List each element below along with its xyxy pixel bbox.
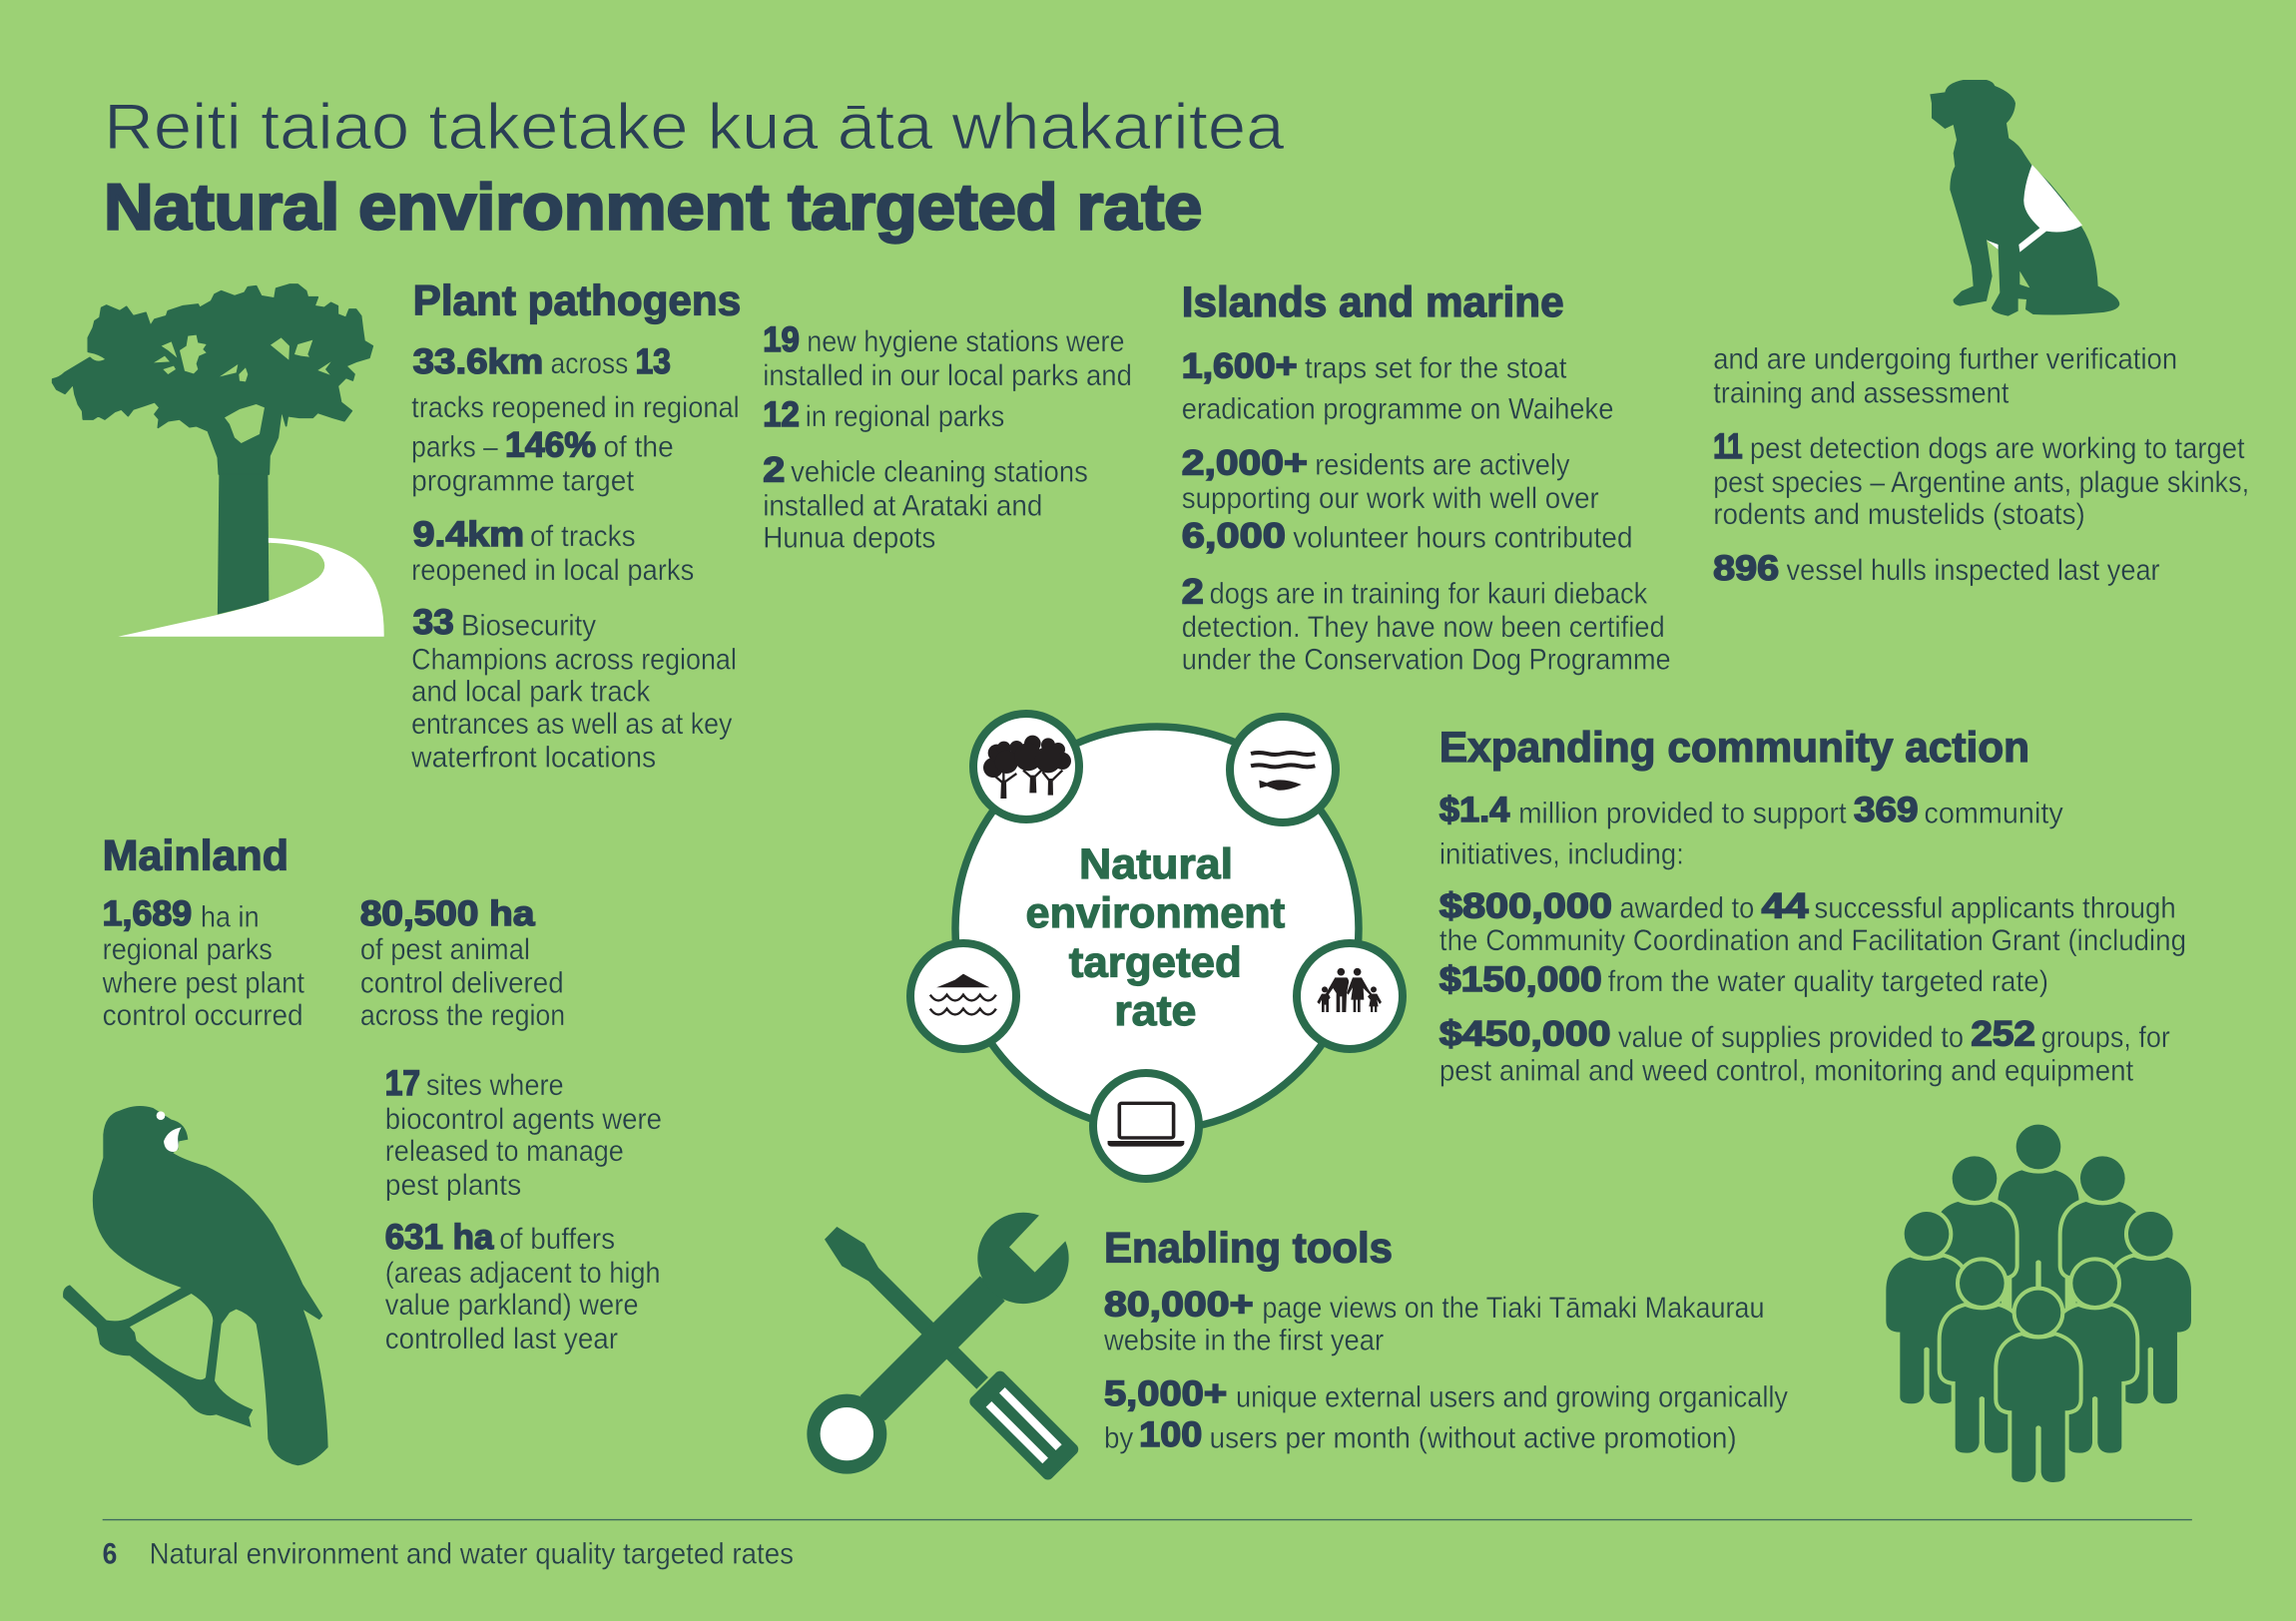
text: dogs and vessel hulls: and are undergoing further verification — [1713, 343, 2177, 376]
heading: mainland: Mainland — [103, 831, 288, 879]
icon badge: family — [1297, 943, 1403, 1049]
text: islands and marine stats: 6,000 — [1182, 517, 1286, 556]
text: plant pathogens stats, first column: 33.6km — [413, 342, 543, 381]
text: pest plant control — [102, 894, 304, 1032]
text: hygiene and cleaning stations: Hunua depots — [763, 522, 935, 555]
text: pest plant control: control occurred — [103, 999, 303, 1032]
icon badge: laptop — [1093, 1073, 1199, 1179]
text: enabling tools stats: by — [1104, 1422, 1134, 1455]
text: community funding stats: from the water quality targeted rate) — [1608, 965, 2048, 998]
text: community funding stats: $150,000 — [1439, 960, 1602, 999]
text: plant pathogens stats, first column: of tracks — [530, 520, 636, 553]
text: plant pathogens stats, first column: Champions across regional — [411, 643, 737, 676]
icon: group of people — [1886, 1125, 2191, 1482]
text: enabling tools stats: unique external users and growing organically — [1236, 1381, 1788, 1414]
text: plant pathogens stats, first column: and local park track — [411, 676, 651, 709]
text: community funding stats: $450,000 — [1439, 1014, 1611, 1053]
text: community funding stats — [1439, 791, 2186, 1088]
title: Natural environment targeted rate — [104, 172, 1202, 244]
text: islands and marine stats: volunteer hours contributed — [1293, 522, 1633, 555]
text: enabling tools stats: website in the first year — [1103, 1324, 1384, 1356]
label: natural environment targeted rate: targeted — [1069, 938, 1242, 986]
text: hygiene and cleaning stations: vehicle cleaning stations — [791, 456, 1088, 489]
text: plant pathogens stats, first column: Biosecurity — [461, 610, 596, 643]
text: islands and marine stats: residents are actively — [1315, 448, 1570, 481]
text: community funding stats: 252 — [1971, 1014, 2035, 1053]
heading: islands and marine: Islands and marine — [1182, 278, 1564, 326]
text: community funding stats: pest animal and weed control, monitoring and equipment — [1439, 1055, 2133, 1088]
text: hygiene and cleaning stations: 19 — [763, 320, 800, 359]
text: biocontrol and buffers: 631 ha — [385, 1218, 494, 1257]
heading: expanding community action: Expanding community action — [1439, 724, 2029, 772]
text: enabling tools stats: 5,000+ — [1104, 1374, 1227, 1413]
icon badge: island and waves — [910, 943, 1016, 1049]
text: community funding stats: $1.4 — [1439, 791, 1510, 829]
panel: mainland — [102, 831, 662, 1355]
text: biocontrol and buffers: of buffers — [499, 1223, 615, 1256]
text: dogs and vessel hulls — [1713, 343, 2249, 588]
icon badge: trees — [973, 714, 1079, 819]
icon: crossed wrench and screwdriver — [807, 1213, 1081, 1482]
text: pest animal control — [360, 894, 565, 1032]
text: hygiene and cleaning stations: in regional parks — [806, 400, 1004, 433]
text: plant pathogens stats, first column: 33 — [413, 603, 454, 642]
text: hygiene and cleaning stations: installed at Arataki and — [763, 489, 1042, 522]
panel: islands and marine — [1182, 278, 2249, 676]
text: dogs and vessel hulls: pest detection dogs are working to target — [1750, 432, 2245, 465]
text: islands and marine stats: detection. They have now been certified — [1182, 611, 1665, 644]
text: community funding stats: groups, for — [2041, 1021, 2170, 1054]
text: pest animal control: across the region — [360, 999, 565, 1032]
footer: Natural environment and water quality targeted rates — [150, 1538, 794, 1571]
text: community funding stats: $800,000 — [1439, 887, 1612, 926]
text: islands and marine stats: 2,000+ — [1182, 443, 1308, 482]
title: Reiti taiao taketake kua āta whakaritea — [104, 91, 1285, 163]
text: biocontrol and buffers: controlled last year — [385, 1323, 618, 1355]
text: enabling tools stats: 100 — [1139, 1415, 1202, 1454]
text: islands and marine stats: dogs are in training for kauri dieback — [1210, 577, 1647, 610]
text: plant pathogens stats, first column: of the — [603, 431, 674, 464]
text: pest plant control: where pest plant — [102, 967, 304, 1000]
text: plant pathogens stats, first column: programme target — [411, 464, 634, 497]
text: dogs and vessel hulls: rodents and mustelids (stoats) — [1713, 498, 2085, 531]
text: enabling tools stats: 80,000+ — [1104, 1286, 1254, 1325]
text: hygiene and cleaning stations: 12 — [763, 395, 800, 434]
text: pest plant control: ha in — [201, 901, 260, 934]
label: natural environment targeted rate: rate — [1114, 987, 1196, 1035]
text: community funding stats: 369 — [1854, 791, 1919, 829]
text: pest plant control: regional parks — [103, 933, 273, 966]
text: biocontrol and buffers: released to manage — [385, 1135, 624, 1168]
text: biocontrol and buffers: sites where — [426, 1069, 564, 1102]
title — [104, 91, 1285, 244]
text: hygiene and cleaning stations — [763, 320, 1132, 555]
label: natural environment targeted rate: environment — [1026, 889, 1285, 937]
text: plant pathogens stats, first column: waterfront locations — [410, 742, 656, 775]
text: community funding stats: awarded to — [1619, 892, 1754, 925]
text: enabling tools stats — [1103, 1286, 1788, 1455]
text: community funding stats: million provided to support — [1518, 797, 1847, 829]
text: islands and marine stats: under the Conservation Dog Programme — [1182, 643, 1671, 676]
text: islands and marine stats: supporting our work with well over — [1182, 482, 1599, 515]
text: hygiene and cleaning stations: 2 — [763, 451, 785, 490]
heading: enabling tools: Enabling tools — [1104, 1224, 1393, 1272]
text: plant pathogens stats, first column: parks – — [411, 431, 498, 464]
footer: 6 — [103, 1538, 117, 1571]
text: hygiene and cleaning stations: new hygiene stations were — [807, 325, 1125, 358]
text: islands and marine stats: 1,600+ — [1182, 346, 1298, 385]
text: pest animal control: of pest animal — [360, 933, 530, 966]
icon: kaka bird on branch — [63, 1106, 328, 1465]
text: islands and marine stats: 2 — [1182, 572, 1204, 611]
text: pest plant control: 1,689 — [103, 894, 192, 933]
icon badge: water and fish — [1230, 717, 1336, 822]
diagram: central circle with five icons — [910, 714, 1403, 1179]
text: community funding stats: the Community Coordination and Facilitation Grant (including — [1439, 924, 2186, 957]
text: plant pathogens stats, first column: across — [551, 347, 628, 380]
text: plant pathogens stats, first column: reopened in local parks — [411, 554, 694, 587]
text: plant pathogens stats, first column: 13 — [636, 342, 671, 381]
text: dogs and vessel hulls: training and assessment — [1713, 376, 2009, 409]
text: islands and marine stats: eradication programme on Waiheke — [1182, 393, 1613, 426]
text: dogs and vessel hulls: 11 — [1713, 427, 1743, 466]
text: community funding stats: community — [1924, 797, 2063, 829]
text: biocontrol and buffers: (areas adjacent to high — [385, 1257, 661, 1290]
text: biocontrol and buffers: pest plants — [385, 1169, 521, 1202]
text: pest animal control: control delivered — [360, 967, 564, 1000]
text: enabling tools stats: users per month (without active promotion) — [1210, 1422, 1737, 1455]
main white circle — [955, 727, 1359, 1130]
label: natural environment targeted rate — [1026, 840, 1285, 1035]
text: islands and marine stats: traps set for the stoat — [1305, 351, 1567, 384]
text: plant pathogens stats, first column: entrances as well as at key — [411, 708, 733, 741]
text: community funding stats: successful applicants through — [1814, 892, 2176, 925]
text: community funding stats: value of supplies provided to — [1618, 1021, 1964, 1054]
panel: plant pathogens — [410, 276, 1132, 775]
text: biocontrol and buffers: biocontrol agents were — [385, 1103, 662, 1136]
text: plant pathogens stats, first column — [410, 342, 740, 775]
text: plant pathogens stats, first column: tracks reopened in regional — [411, 391, 740, 424]
text: plant pathogens stats, first column: 146% — [505, 426, 596, 465]
text: dogs and vessel hulls: pest species – Argentine ants, plague skinks, — [1713, 466, 2249, 499]
text: hygiene and cleaning stations: installed in our local parks and — [763, 359, 1132, 392]
text: enabling tools stats: page views on the Tiaki Tāmaki Makaurau — [1262, 1292, 1765, 1325]
text: biocontrol and buffers — [385, 1064, 662, 1355]
label: natural environment targeted rate: Natural — [1079, 840, 1233, 888]
text: biocontrol and buffers: 17 — [385, 1064, 420, 1103]
panel: enabling tools — [1103, 1224, 1788, 1455]
panel: expanding community action — [1439, 724, 2186, 1088]
text: dogs and vessel hulls: 896 — [1713, 549, 1779, 588]
text: plant pathogens stats, first column: 9.4km — [413, 515, 524, 554]
text: dogs and vessel hulls: vessel hulls inspected last year — [1787, 554, 2160, 587]
text: community funding stats: 44 — [1762, 887, 1809, 926]
text: community funding stats: initiatives, including: — [1439, 837, 1684, 870]
icon: detection dog with white vest — [1930, 80, 2119, 316]
icon: tree with path — [53, 284, 384, 637]
text: islands and marine stats — [1182, 346, 1671, 676]
text: biocontrol and buffers: value parkland) were — [385, 1289, 639, 1322]
heading: plant pathogens: Plant pathogens — [413, 276, 741, 324]
footer — [103, 1520, 2192, 1571]
text: pest animal control: 80,500 ha — [360, 894, 535, 933]
